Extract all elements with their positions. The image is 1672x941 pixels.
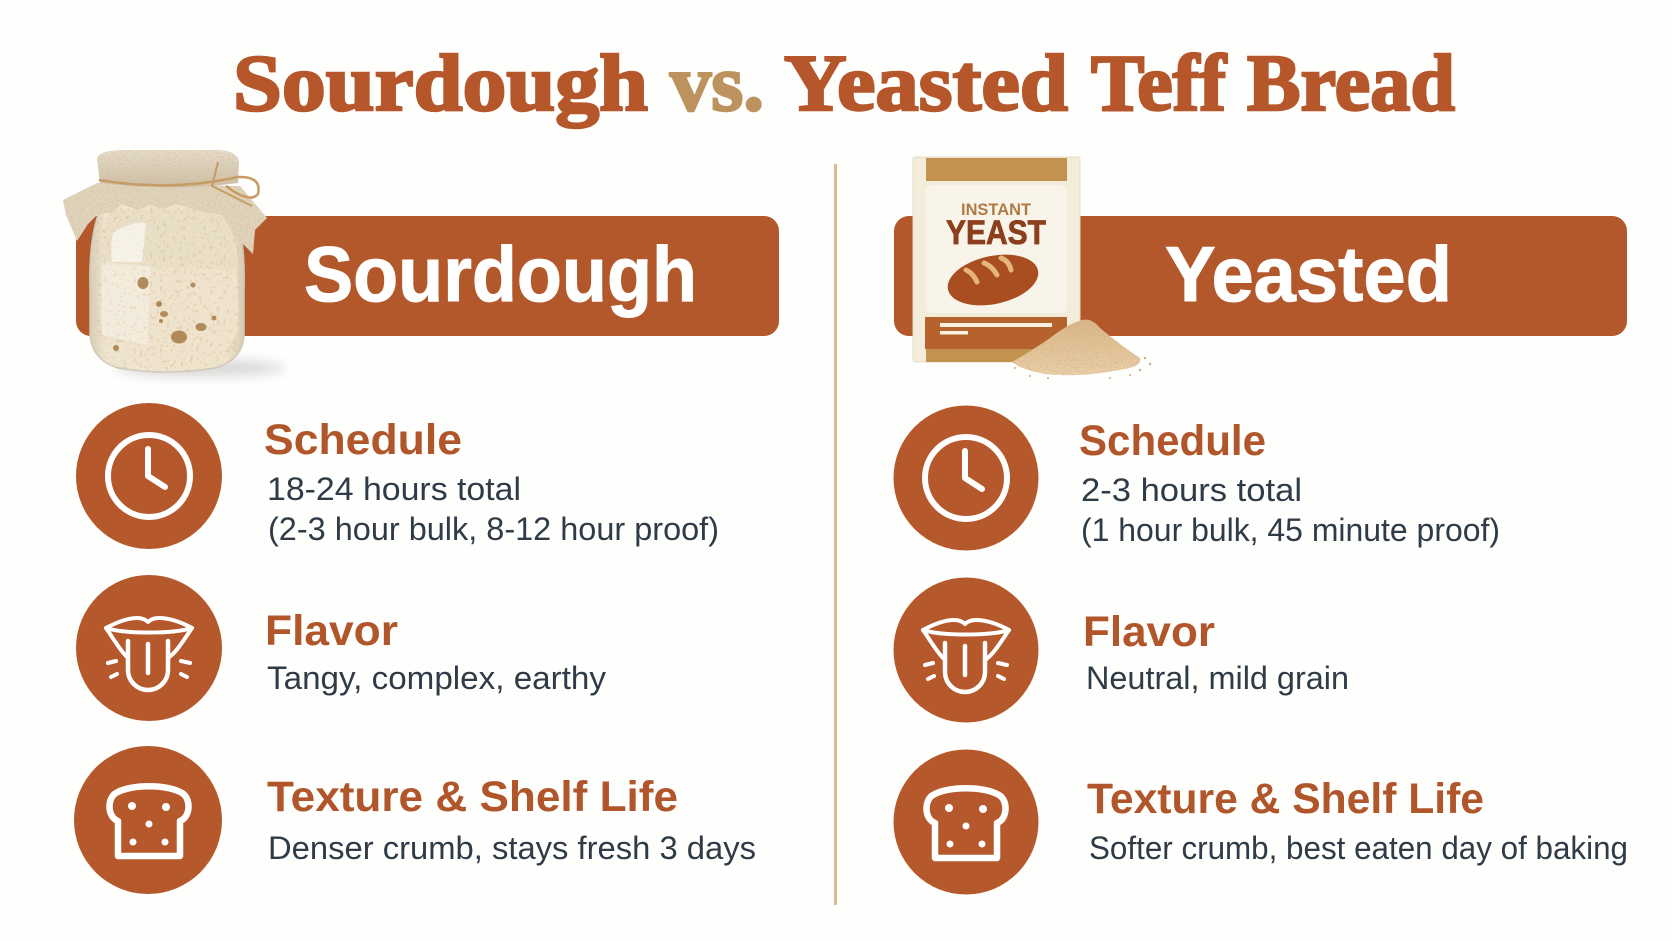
row: flavor (76, 575, 606, 721)
icon: clock (894, 406, 1038, 550)
icon: bread slice (894, 750, 1038, 894)
row: flavor: Flavor (265, 607, 398, 655)
row: schedule: (2-3 hour bulk, 8-12 hour proof) (268, 511, 719, 547)
row: schedule: (1 hour bulk, 45 minute proof) (1081, 512, 1500, 548)
row: schedule: Schedule (1079, 417, 1266, 465)
banner: sourdough (76, 216, 779, 336)
row: flavor: Neutral, mild grain (1086, 660, 1349, 696)
row: texture and shelf life: Texture & Shelf Life (1087, 775, 1484, 823)
title: vs. (670, 38, 764, 128)
image: sourdough starter jar (60, 148, 285, 376)
title: Yeasted (784, 38, 1068, 128)
title: Sourdough (233, 38, 648, 128)
row: schedule (76, 403, 719, 549)
panel: yeasted (894, 157, 1628, 894)
image: instant yeast packet: INSTANT (961, 200, 1032, 219)
row: texture and shelf life: Softer crumb, best eaten day of baking (1089, 830, 1628, 866)
title (233, 38, 1455, 128)
row: flavor: Tangy, complex, earthy (267, 660, 606, 696)
row: texture and shelf life (74, 746, 756, 894)
icon: bread slice (74, 746, 222, 894)
icon: tongue (894, 578, 1038, 722)
title: Teff (1091, 38, 1227, 128)
center divider (834, 164, 837, 905)
row: flavor (894, 578, 1349, 722)
row: schedule: 18-24 hours total (267, 471, 521, 507)
title: Bread (1247, 38, 1455, 128)
row: schedule: Schedule (264, 416, 462, 464)
image: instant yeast packet: YEAST (946, 214, 1046, 252)
row: schedule (894, 406, 1500, 550)
row: texture and shelf life: Denser crumb, stays fresh 3 days (268, 830, 756, 866)
banner: sourdough: Sourdough (304, 230, 697, 318)
banner: yeasted (894, 216, 1627, 336)
row: flavor: Flavor (1083, 608, 1215, 656)
row: texture and shelf life (894, 750, 1628, 894)
image: instant yeast packet (913, 157, 1151, 379)
row: schedule: 2-3 hours total (1081, 472, 1302, 508)
banner: yeasted: Yeasted (1165, 230, 1452, 318)
panel: sourdough (60, 148, 779, 894)
icon: clock (76, 403, 222, 549)
row: texture and shelf life: Texture & Shelf Life (267, 773, 678, 821)
icon: tongue (76, 575, 222, 721)
